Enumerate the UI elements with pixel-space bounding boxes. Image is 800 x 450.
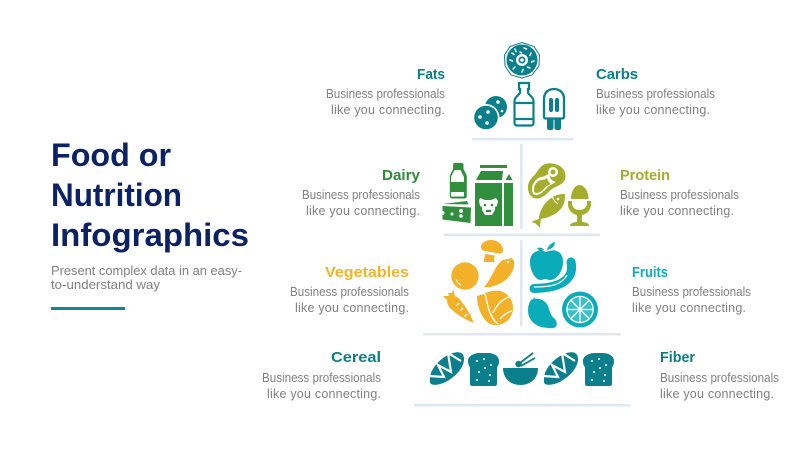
label: Cereal: like you connecting. (267, 387, 381, 401)
label: Protein: Protein (620, 167, 670, 184)
label: Dairy: like you connecting. (306, 204, 420, 218)
icon: mango (528, 297, 557, 328)
label: Cereal (262, 349, 381, 401)
label: Carbs: Carbs (596, 66, 638, 83)
label: Fats (326, 66, 445, 117)
label: Fruits: like you connecting. (632, 301, 746, 315)
label: Carbs (596, 66, 715, 117)
icon: cabbage (477, 291, 513, 325)
label: Fats: Business professionals (326, 87, 445, 101)
label: Dairy: Dairy (382, 167, 421, 184)
icon: apple (530, 242, 563, 280)
label: Fiber: Fiber (660, 349, 695, 366)
icon: bottle (514, 83, 534, 126)
label: Carbs: like you connecting. (596, 103, 710, 117)
icon: fish (529, 193, 566, 229)
subtitle (51, 264, 242, 292)
title underline (51, 307, 125, 310)
label: Fats: Fats (417, 66, 445, 83)
icon: donut (504, 42, 540, 78)
label: Fruits: Business professionals (632, 285, 751, 299)
icon: bread loaf right (543, 352, 578, 385)
icon: citrus (562, 292, 598, 328)
label: Vegetables: Business professionals (290, 285, 409, 299)
label: Vegetables: Vegetables (325, 264, 409, 281)
title (51, 137, 249, 253)
icon: mushroom (481, 240, 503, 262)
label: Fiber: Business professionals (660, 371, 779, 385)
icon: steak (528, 163, 566, 199)
icon: bread loaf left (429, 352, 464, 385)
icon: popsicle (544, 89, 564, 130)
pyramid shelves and dividers (414, 138, 630, 406)
label: Dairy (302, 167, 421, 218)
icon: pepper (484, 258, 514, 287)
label: Cereal: Cereal (331, 349, 381, 366)
icon: cookies (472, 96, 507, 131)
icon: orange (451, 262, 479, 290)
label: Protein (620, 167, 739, 218)
icon: bowl (503, 353, 538, 385)
label: Protein: like you connecting. (620, 204, 734, 218)
label: Protein: Business professionals (620, 188, 739, 202)
label: Dairy: Business professionals (302, 188, 420, 202)
label: Fats: like you connecting. (331, 103, 445, 117)
label: Vegetables (290, 264, 409, 315)
icon: egg cup (568, 185, 591, 226)
label: Fiber (660, 349, 779, 401)
title: Infographics (51, 217, 249, 253)
title: Food or (51, 137, 171, 173)
label: Vegetables: like you connecting. (295, 301, 409, 315)
label: Fiber: like you connecting. (660, 387, 774, 401)
icon: milk bottle (450, 163, 467, 198)
subtitle: to-understand way (51, 278, 161, 292)
icon: bread slice left (468, 353, 499, 386)
icon: cheese (442, 201, 471, 223)
label: Fruits: Fruits (632, 264, 668, 281)
label: Cereal: Business professionals (262, 371, 381, 385)
icon: carrot (443, 289, 474, 323)
title: Nutrition (51, 177, 182, 213)
label: Carbs: Business professionals (596, 87, 715, 101)
label: Fruits (632, 264, 751, 315)
subtitle: Present complex data in an easy- (51, 264, 242, 278)
icon: bread slice right (583, 353, 614, 386)
icon: banana (534, 262, 572, 288)
icon: milk carton (475, 165, 513, 226)
